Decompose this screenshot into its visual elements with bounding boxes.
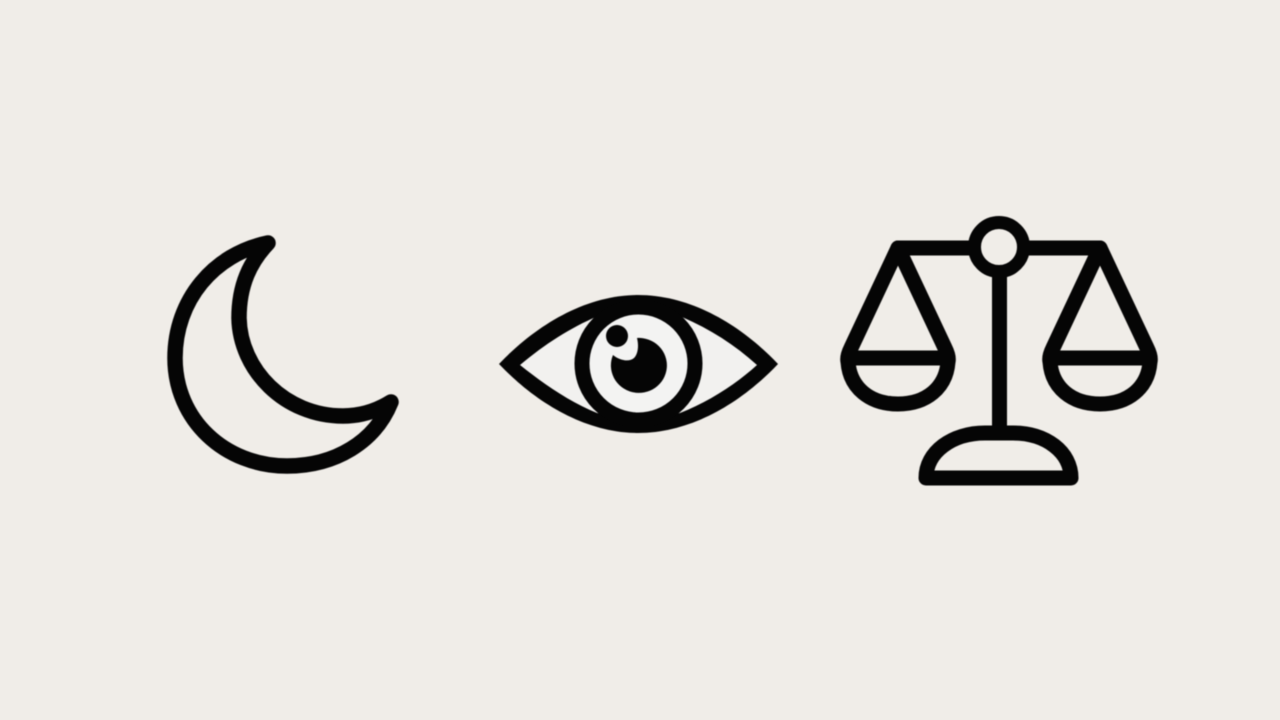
beam [898,240,1100,256]
icon: crescent moon [175,243,391,466]
pivot ring [974,222,1024,272]
stem [992,262,1007,432]
right pan [1050,248,1150,404]
icon: eye [499,295,778,433]
base [926,433,1071,478]
left pan [848,248,948,404]
icon: balance scales [848,222,1150,478]
